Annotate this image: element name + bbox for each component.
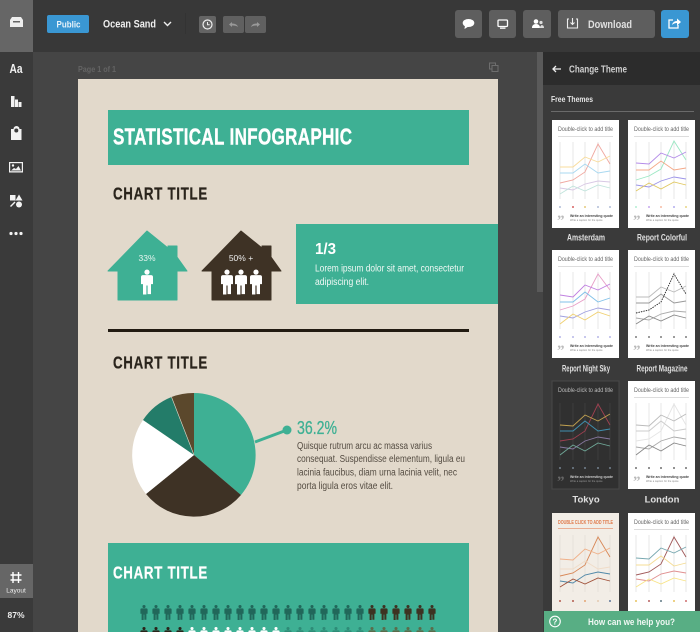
icon: help: ? (553, 618, 558, 626)
icon: layers tray (10, 17, 23, 27)
thumbnail: Tokyo: Write a caption for the quote (570, 479, 603, 483)
callout: 1/3: adipiscing elit. (315, 277, 369, 288)
thumbnail: white theme: Double-click to add title (634, 520, 690, 526)
left sidebar (0, 0, 33, 632)
page scrollbar (537, 52, 543, 292)
thumbnail: Report Colorful (628, 120, 695, 229)
thumbnail: white theme (628, 513, 695, 621)
help bar: How can we help you? (588, 617, 675, 627)
thumbnail: Amsterdam: ” (557, 213, 564, 229)
callout: 36.2%: 36.2% (297, 418, 337, 438)
thumbnail: orange theme (552, 513, 619, 621)
callout: 36.2%: Quisque rutrum arcu ac massa varius (297, 441, 432, 452)
title banner: STATISTICAL INFOGRAPHIC (113, 125, 352, 150)
download button (558, 10, 655, 38)
callout: 36.2%: lacinia faucibus, diam urna lacinia velit, nec (297, 468, 457, 478)
free themes heading: Free Themes (551, 94, 593, 104)
heading: chart title: CHART TITLE (113, 185, 207, 204)
thumbnail label: Report Night Sky (562, 364, 610, 374)
pie chart (132, 393, 256, 517)
icon: export button (661, 10, 689, 38)
callout: 36.2% (255, 418, 465, 492)
icon: map (11, 126, 22, 140)
icon: text: Aa (10, 61, 23, 76)
callout: 1/3: Lorem ipsum dolor sit amet, consectetur (315, 264, 465, 274)
thumbnail label: Tokyo (572, 494, 600, 506)
thumbnail: Report Colorful: Write an interesting quote (646, 214, 689, 218)
thumbnail label: Amsterdam (567, 232, 605, 244)
thumbnail: orange theme: DOUBLE CLICK TO ADD TITLE (558, 520, 613, 526)
title banner (108, 110, 469, 165)
thumbnail: London: Write a caption for the quote (646, 479, 679, 483)
icon: help (550, 616, 560, 627)
theme selector: Ocean Sand (103, 18, 156, 30)
icon: teal house 33%: 33% (138, 253, 156, 263)
thumbnail: Tokyo: Write an interesting quote (570, 475, 613, 479)
thumbnail: Amsterdam (552, 120, 619, 229)
thumbnail: Report Magazine (628, 250, 695, 359)
icon: history clock (199, 16, 216, 33)
thumbnail: Report Night Sky (552, 250, 619, 359)
thumbnail: Report Magazine: Write a caption for the quote (646, 348, 679, 352)
thumbnail: Amsterdam: Double-click to add title (558, 127, 614, 133)
thumbnail label: London (645, 494, 680, 506)
heading: chart title: CHART TITLE (113, 564, 207, 583)
page label: Page 1 of 1 (78, 65, 116, 74)
icon: undo and redo (223, 16, 266, 33)
icon: brown house 50%+ (202, 231, 281, 300)
layout button (0, 564, 33, 598)
thumbnail: Amsterdam: Write an interesting quote (570, 214, 613, 218)
thumbnail: Report Magazine: Write an interesting quote (646, 344, 689, 348)
thumbnail: Report Night Sky: Write an interesting quote (570, 344, 613, 348)
icon: present button (489, 10, 516, 38)
icon: copy page (490, 63, 498, 72)
download button: Download (588, 19, 632, 31)
thumbnail: London: Double-click to add title (634, 388, 690, 394)
thumbnail: Report Magazine: ” (633, 343, 640, 359)
thumbnail: Tokyo: ” (557, 474, 564, 490)
layout button: Layout (6, 588, 26, 594)
icon row: people row two (140, 627, 436, 632)
icon: shapes (10, 194, 22, 208)
public button: Public (56, 20, 80, 30)
icon: more (9, 232, 23, 235)
thumbnail: Report Colorful: Double-click to add title (634, 127, 690, 133)
thumbnail: Report Night Sky: Double-click to add title (558, 257, 614, 263)
help bar (544, 611, 700, 632)
top toolbar (33, 0, 700, 52)
thumbnail: Tokyo (552, 381, 619, 490)
icon row: people row one (140, 605, 436, 620)
thumbnail: London (628, 381, 695, 490)
public button (47, 15, 89, 33)
icon: teal house 33% (108, 231, 187, 300)
icon: chart (11, 96, 22, 107)
zoom level: 87% (7, 610, 25, 620)
thumbnail: Report Colorful: Write a caption for the quote (646, 218, 679, 222)
thumbnail: Amsterdam: Write a caption for the quote (570, 218, 603, 222)
icon: back arrow (553, 66, 561, 72)
thumbnail: London: ” (633, 474, 640, 490)
icon: share people button (523, 10, 551, 38)
thumbnail: Tokyo: Double-click to add title (558, 388, 614, 394)
icon: image (9, 162, 23, 172)
thumbnail: Report Night Sky: Write a caption for the quote (570, 348, 603, 352)
thumbnail: London: Write an interesting quote (646, 475, 689, 479)
callout: 36.2%: consequat. Suspendisse elementum, ligula eu (297, 454, 465, 465)
callout: 1/3: 1/3 (315, 241, 336, 258)
icon: brown house 50%+: 50% + (229, 253, 253, 263)
thumbnail: Report Night Sky: ” (557, 343, 564, 359)
callout: 1/3 (296, 224, 498, 304)
infographic page (78, 79, 498, 632)
callout: 36.2%: porta ligula eros vitae elit. (297, 481, 393, 492)
icon: comment button (455, 10, 482, 38)
heading: chart title: CHART TITLE (113, 354, 207, 373)
thumbnail: Report Colorful: ” (633, 213, 640, 229)
panel: people chart (108, 543, 469, 632)
thumbnail: Report Magazine: Double-click to add title (634, 257, 690, 263)
panel heading: Change Theme (569, 64, 627, 76)
panel: change theme (543, 52, 700, 632)
